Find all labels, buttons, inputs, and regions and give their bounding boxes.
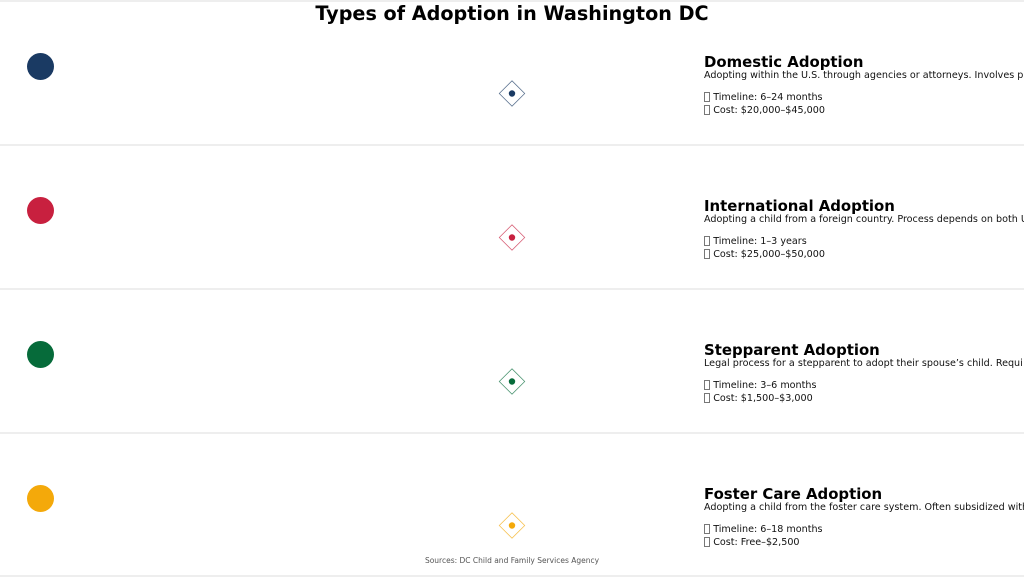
text block: stepparent adoption details (704, 341, 1023, 404)
panel: stepparent adoption (27, 341, 1023, 404)
panel: foster care adoption (27, 485, 1024, 548)
icon: navy diamond marker (498, 80, 526, 107)
cost: stepparent adoption: Cost: $1,500–$3,000 (713, 393, 813, 404)
cost: foster care adoption: Cost: Free–$2,500 (713, 537, 800, 548)
icon: amber diamond marker (498, 512, 526, 539)
timeline: foster care adoption: Timeline: 6–18 months (713, 524, 823, 535)
timeline: stepparent adoption: Timeline: 3–6 months (713, 380, 816, 391)
icon: red diamond marker (498, 224, 526, 251)
heading: international adoption: International Adoption (704, 197, 895, 215)
title: Types of Adoption in Washington DC (315, 2, 709, 25)
description: domestic adoption: Adopting within the U.S. through agencies or attorneys. Involves p (704, 70, 1023, 81)
text block: domestic adoption details (704, 53, 1023, 116)
panel: international adoption (27, 197, 1024, 260)
panel: domestic adoption (27, 53, 1023, 116)
icon: green circle (26, 341, 54, 368)
heading: foster care adoption: Foster Care Adoption (704, 485, 882, 503)
cost: international adoption: Cost: $25,000–$50,000 (713, 249, 825, 260)
icon: red circle (26, 197, 54, 224)
text block: foster care adoption details (704, 485, 1024, 548)
icon: navy circle (26, 53, 54, 80)
description: foster care adoption: Adopting a child from the foster care system. Often subsidized with (704, 502, 1024, 513)
icon: green diamond marker (498, 368, 526, 395)
heading: domestic adoption: Domestic Adoption (704, 53, 863, 71)
text block: international adoption details (704, 197, 1024, 260)
timeline: international adoption: Timeline: 1–3 years (713, 236, 807, 247)
icon: amber circle (26, 485, 54, 512)
heading: stepparent adoption: Stepparent Adoption (704, 341, 880, 359)
cost: domestic adoption: Cost: $20,000–$45,000 (713, 105, 825, 116)
description: stepparent adoption: Legal process for a stepparent to adopt their spouse’s child. Requi (704, 358, 1023, 369)
description: international adoption: Adopting a child from a foreign country. Process depends on both U (704, 214, 1024, 225)
sources note: Sources: DC Child and Family Services Agency (425, 556, 599, 565)
timeline: domestic adoption: Timeline: 6–24 months (713, 92, 823, 103)
